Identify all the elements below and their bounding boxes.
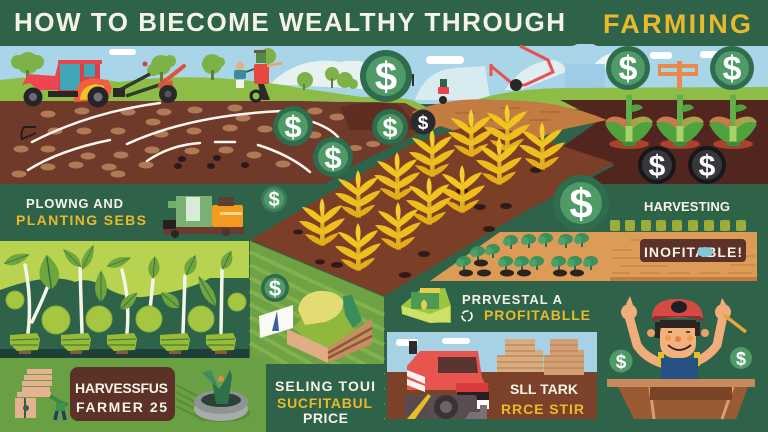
heading: plowing and planting bbox=[16, 196, 146, 228]
field holes bbox=[459, 260, 584, 276]
coin: black right bbox=[688, 146, 726, 184]
panel: seedlings bbox=[0, 241, 249, 358]
coin: black small: $ bbox=[418, 113, 429, 134]
label: harvest farmer bbox=[70, 367, 175, 421]
lumber stacks bbox=[497, 339, 584, 375]
coin: field small: $ bbox=[269, 276, 281, 301]
cabbage bbox=[295, 310, 356, 348]
farmer cap bbox=[652, 299, 703, 318]
coin: centre bbox=[372, 109, 408, 145]
coin: farmer right bbox=[730, 347, 752, 369]
panel: selling price label: SELING TOUI bbox=[275, 378, 375, 394]
coin: black left bbox=[638, 146, 676, 184]
icon: plow implement bbox=[113, 62, 184, 103]
icon: farmer and scarecrow bbox=[234, 50, 282, 101]
label: harvest farmer: FARMER 25 bbox=[76, 399, 167, 415]
trees bbox=[11, 48, 358, 89]
coin: black right: $ bbox=[699, 150, 716, 183]
crate box bbox=[287, 329, 328, 363]
icon: planter machine bbox=[163, 196, 244, 238]
heading: harvest and profitable: PRRVESTAL A bbox=[462, 292, 563, 307]
coin: farmer left: $ bbox=[616, 352, 627, 373]
panel: selling price label bbox=[266, 364, 384, 432]
icon: happy farmer bbox=[607, 296, 755, 419]
icon: harvest block bbox=[401, 288, 451, 323]
panel: truck and lumber bbox=[387, 332, 597, 419]
coin: top right left bbox=[606, 46, 650, 90]
soil clods bbox=[12, 104, 380, 178]
panel: plowed soil field bbox=[0, 101, 440, 184]
coin: black small bbox=[410, 110, 436, 134]
heading: harvest and profitable bbox=[462, 292, 590, 323]
coin: soil one: $ bbox=[284, 109, 302, 144]
panel: title banner bbox=[0, 0, 580, 46]
crop row bbox=[610, 220, 746, 231]
seedling stacks bbox=[10, 333, 40, 354]
coin: farmer left bbox=[610, 350, 632, 373]
coin: large lower field: $ bbox=[569, 180, 593, 227]
plow furrow lines bbox=[28, 103, 338, 172]
label: harvest farmer: HARVESSFUS bbox=[75, 380, 168, 396]
crate in front bbox=[607, 379, 755, 387]
icon: small rider bbox=[412, 74, 449, 104]
farmer overalls bbox=[658, 352, 664, 366]
coin: soil two: $ bbox=[324, 140, 342, 175]
icon: harvest crate bbox=[259, 291, 372, 363]
panel: lower right field bbox=[430, 220, 757, 281]
panel: top right plants bbox=[605, 95, 757, 149]
heading: harvest and profitable: PROFITABLLE bbox=[484, 307, 590, 323]
panel: farm scene sky and hills bbox=[0, 44, 768, 112]
label: profitable banner: INOFITABLE! bbox=[644, 244, 742, 260]
seeds bbox=[174, 155, 249, 169]
harvester truck bbox=[409, 341, 417, 354]
heading: harvesting: HARVESTING bbox=[644, 199, 730, 214]
icon: red farm tool bbox=[491, 46, 553, 91]
hook tool bbox=[21, 127, 36, 139]
title keyword: FARMIING bbox=[603, 9, 751, 39]
panel: lower green field bbox=[0, 241, 384, 432]
farmer head bbox=[660, 320, 696, 358]
coin: top right right bbox=[710, 46, 754, 90]
heading: plowing and planting: PLANTING SEBS bbox=[16, 212, 146, 228]
soil seeds bbox=[293, 167, 542, 278]
seedling leaves bbox=[37, 253, 61, 291]
farmer arms bbox=[629, 316, 723, 364]
price flag bbox=[259, 305, 293, 338]
truck label: SLL TARK bbox=[510, 381, 578, 397]
panel: selling price label: PRICE bbox=[303, 410, 348, 426]
panel: corn field bbox=[250, 104, 614, 296]
coin: large lower field bbox=[553, 175, 609, 231]
coin: field small bbox=[261, 274, 289, 302]
coin: top field large bbox=[360, 50, 412, 102]
coin: panel small: $ bbox=[268, 189, 280, 211]
panel: truck and lumber: RRCE STIR bbox=[501, 401, 584, 417]
corn plants bbox=[519, 122, 565, 170]
panel: title banner right bbox=[590, 0, 768, 46]
coin: top right left: $ bbox=[619, 50, 638, 88]
seedling stems bbox=[25, 265, 222, 333]
heading: plowing and planting: PLOWNG AND bbox=[26, 196, 123, 211]
icon: crates and farmer lifting bbox=[15, 369, 68, 420]
icon: well with sprout bbox=[194, 370, 250, 422]
coin: soil one bbox=[273, 106, 313, 146]
field sprouts bbox=[456, 233, 598, 270]
title text: HOW TO BIECOME WEALTHY THROUGH bbox=[14, 7, 565, 37]
icon: signpost bbox=[658, 61, 698, 89]
panel: distant dark soil and orange hill bbox=[340, 99, 768, 230]
icon: tractor bbox=[22, 60, 112, 108]
panel: selling price label: SUCFITABUL bbox=[277, 395, 372, 411]
seedling fruit bbox=[6, 291, 246, 334]
coin: soil two bbox=[313, 137, 353, 177]
coin: top right right: $ bbox=[723, 50, 742, 88]
coin: top field large: $ bbox=[375, 55, 397, 99]
coin: black left: $ bbox=[649, 150, 666, 183]
label: profitable banner bbox=[640, 239, 746, 262]
coin: panel small bbox=[261, 186, 287, 212]
coin: centre: $ bbox=[382, 113, 398, 143]
coin: farmer right: $ bbox=[736, 349, 746, 369]
